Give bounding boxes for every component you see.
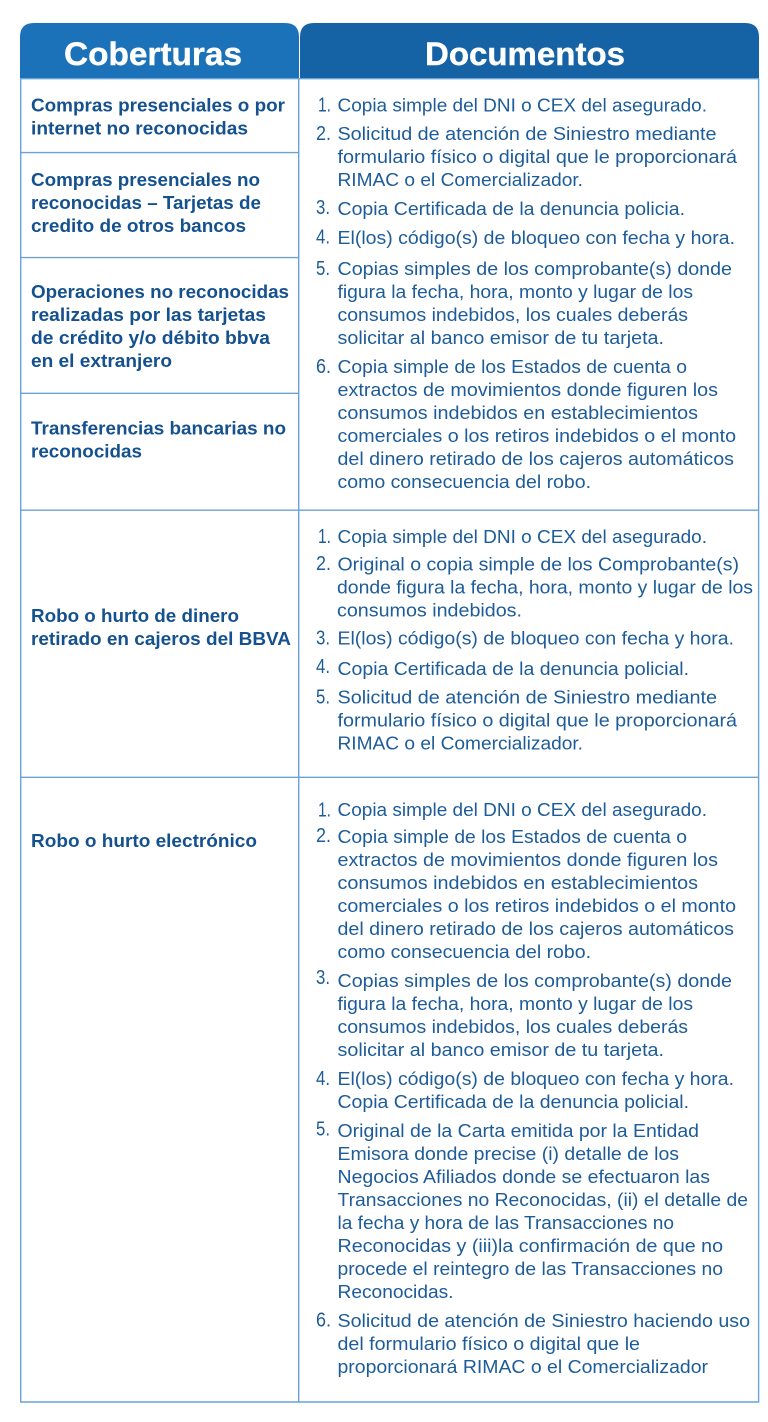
document list 3: El(los) código(s) de bloqueo con fecha y hora. [338,1068,734,1089]
document list 1: Copia simple del DNI o CEX del asegurado. [338,94,707,116]
document list 1: Copia simple de los Estados de cuenta o [338,356,687,377]
document list 1: 2. [316,123,331,145]
document list 1: del dinero retirado de los cajeros automáticos [338,448,734,469]
document list 3: Copias simples de los comprobante(s) donde [338,970,732,991]
document list 2: consumos indebidos. [337,600,522,620]
document list 2: 4. [316,656,330,678]
document list 1: Copia Certificada de la denuncia policia. [338,198,685,219]
header: Documentos [300,23,759,78]
coverage: Compras presenciales o por internet [31,96,285,138]
document list 1: consumos indebidos, los cuales deberás [338,304,688,325]
document list 1: Copias simples de los comprobante(s) donde [338,258,732,279]
header: Coberturas [20,23,299,78]
coverage: Compras presenciales no reconocidas: credito de otros bancos [31,216,246,236]
coverage: Robo o hurto de dinero: Robo o hurto de dinero [31,606,239,626]
document list 3: Copia simple del DNI o CEX del asegurado. [338,799,707,820]
document list 3: la fecha y hora de las Transacciones no [338,1212,674,1233]
document list 1: figura la fecha, hora, monto y lugar de los [338,281,693,302]
coverage: Operaciones no reconocidas: en el extranjero [31,351,172,371]
document list 2: 1. [318,526,331,548]
document list 1: 5. [316,258,330,280]
document list 3: Reconocidas. [338,1281,454,1302]
document list 3: procede el reintegro de las Transacciones no [338,1258,723,1279]
document list 3: Copia simple de los Estados de cuenta o [338,826,687,847]
document list 3: Copia Certificada de la denuncia policial. [338,1091,689,1112]
document list 1: formulario físico o digital que le proporcionará [338,146,738,167]
document list 1: RIMAC o el Comercializador. [338,169,583,190]
document list 2: Copia simple del DNI o CEX del asegurado. [338,526,707,547]
document list 3: 1. [318,800,331,822]
coverage: Operaciones no reconocidas: realizadas por las tarjetas [31,305,266,325]
header: Documentos: Documentos [425,36,625,72]
document list 1: El(los) código(s) de bloqueo con fecha y hora. [338,227,735,248]
coverage: Compras presenciales o por internet: internet no reconocidas [31,118,248,138]
document list 1: 6. [316,356,331,378]
document list 1: 4. [316,226,330,248]
document list 3: Solicitud de atención de Siniestro haciendo uso [338,1310,750,1331]
document list 1: comerciales o los retiros indebidos o el monto [338,425,736,446]
document list 3 [316,799,750,1377]
document list 1: Solicitud de atención de Siniestro mediante [338,123,716,144]
document list 2: RIMAC o el Comercializador. [338,732,583,754]
document list 2: Copia Certificada de la denuncia policial. [338,658,689,679]
document list 3: 3. [316,967,330,989]
document list 1: 3. [316,197,330,219]
document list 2: Solicitud de atención de Siniestro mediante [338,686,717,708]
coverage: Transferencias bancarias: Transferencias bancarias no [31,418,286,438]
document list 2: 3. [316,628,330,650]
coverage: Compras presenciales no reconocidas [31,170,261,236]
coverage: Compras presenciales no reconocidas: Compras presenciales no [31,170,260,190]
coverage: Operaciones no reconocidas: de crédito y/o débito bbva [31,328,271,348]
document list 3: solicitar al banco emisor de tu tarjeta. [338,1039,664,1060]
document list 2: 5. [316,686,330,708]
document list 3: Emisora donde precise (i) detalle de los [338,1143,679,1164]
document list 1 [316,94,738,492]
document list 3: Reconocidas y (iii)la confirmación de que no [338,1235,723,1256]
coverage: Robo o hurto de dinero: retirado en cajeros del BBVA [31,629,291,649]
document list 1: como consecuencia del robo. [338,471,591,492]
document list 3: 2. [316,825,331,847]
document list 1: solicitar al banco emisor de tu tarjeta. [338,327,664,348]
coverage: Operaciones no reconocidas [31,282,289,371]
coverage: Compras presenciales no reconocidas: reconocidas – Tarjetas de [31,193,261,213]
document list 2 [316,526,753,754]
document list 1: consumos indebidos en establecimientos [338,402,698,423]
document list 3: figura la fecha, hora, monto y lugar de los [338,993,693,1014]
document list 2: 2. [316,553,331,575]
document list 3: Original de la Carta emitida por la Entidad [338,1120,699,1141]
document list 3: 5. [316,1118,330,1140]
coverage: Transferencias bancarias: reconocidas [31,442,142,462]
document list 3: consumos indebidos, los cuales deberás [338,1016,688,1037]
coverage: Compras presenciales o por internet: Compras presenciales o por [31,96,285,116]
document list 2: formulario físico o digital que le proporcionará [338,710,738,730]
document list 2: donde figura la fecha, hora, monto y lugar de los [337,576,753,598]
document list 3: comerciales o los retiros indebidos o el monto [338,895,736,916]
document list 3: del formulario físico o digital que le [338,1333,640,1354]
document list 3: 4. [316,1068,330,1090]
document list 2: El(los) código(s) de bloqueo con fecha y hora. [338,628,734,648]
document list 3: extractos de movimientos donde figuren los [338,849,718,870]
header: Coberturas: Coberturas [64,36,242,72]
coverage: Robo o hurto electrónico: Robo o hurto electrónico [31,831,257,851]
document list 1: 1. [318,94,331,116]
document list 3: proporcionará RIMAC o el Comercializador [338,1356,708,1377]
document list 3: Transacciones no Reconocidas, (ii) el detalle de [338,1189,748,1210]
document list 3: del dinero retirado de los cajeros automáticos [338,918,734,939]
coverage: Transferencias bancarias [31,418,286,462]
document list 2: Original o copia simple de los Comprobante(s) [338,554,739,574]
document list 3: consumos indebidos en establecimientos [338,872,698,893]
coverage: Robo o hurto de dinero [31,606,291,649]
document list 3: 6. [316,1310,331,1332]
coverage: Operaciones no reconocidas: Operaciones no reconocidas [31,282,289,302]
document list 1: extractos de movimientos donde figuren los [338,379,718,400]
document list 3: Negocios Afiliados donde se efectuaron las [338,1166,710,1187]
document list 3: como consecuencia del robo. [338,941,591,962]
